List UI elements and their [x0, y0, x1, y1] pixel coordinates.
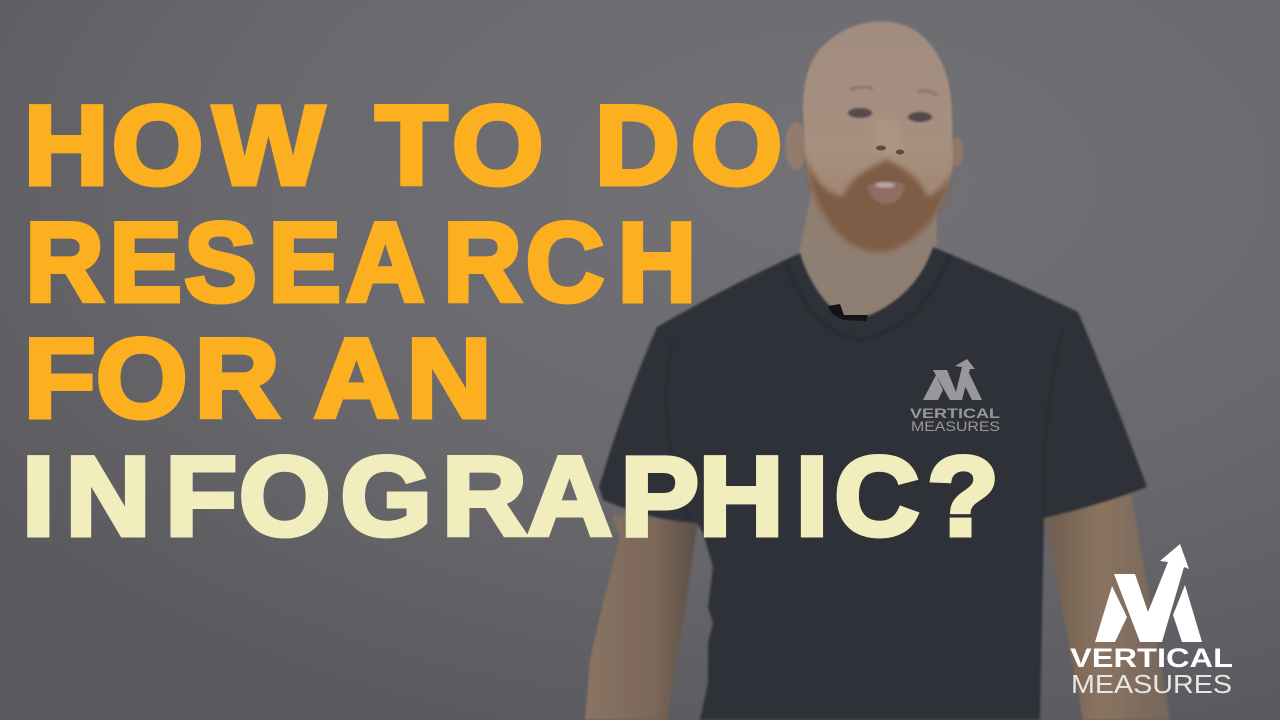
t-shirt — [599, 247, 1147, 720]
right arm — [1044, 488, 1170, 720]
logo wordmark: MEASURES — [1071, 669, 1232, 699]
collar — [785, 255, 950, 340]
title line 4: INFOGRAPHIC? — [22, 435, 999, 559]
presenter — [585, 22, 1170, 720]
sleeve seams — [666, 330, 1062, 520]
shirt logo: MEASURES — [911, 418, 1000, 434]
logo mark — [1095, 544, 1202, 642]
title line 2: RESEARCH — [25, 201, 696, 325]
brand logo — [1070, 544, 1233, 699]
shirt logo — [910, 359, 1001, 434]
eyes — [848, 108, 932, 122]
mouth — [867, 181, 905, 204]
microphone — [828, 304, 868, 321]
title — [22, 84, 999, 559]
nose — [873, 120, 905, 153]
left ear — [785, 122, 807, 170]
neck — [798, 190, 938, 320]
logo wordmark: VERTICAL — [1070, 643, 1233, 673]
title line 3: FOR AN — [24, 317, 492, 441]
head — [803, 22, 953, 252]
beard — [805, 153, 953, 252]
title line 1: HOW TO DO — [24, 84, 782, 208]
right ear — [951, 137, 963, 167]
left arm — [585, 515, 698, 720]
eyebrows — [850, 87, 937, 96]
logo wordmark — [1070, 643, 1233, 699]
shirt logo: VERTICAL — [910, 405, 1001, 421]
